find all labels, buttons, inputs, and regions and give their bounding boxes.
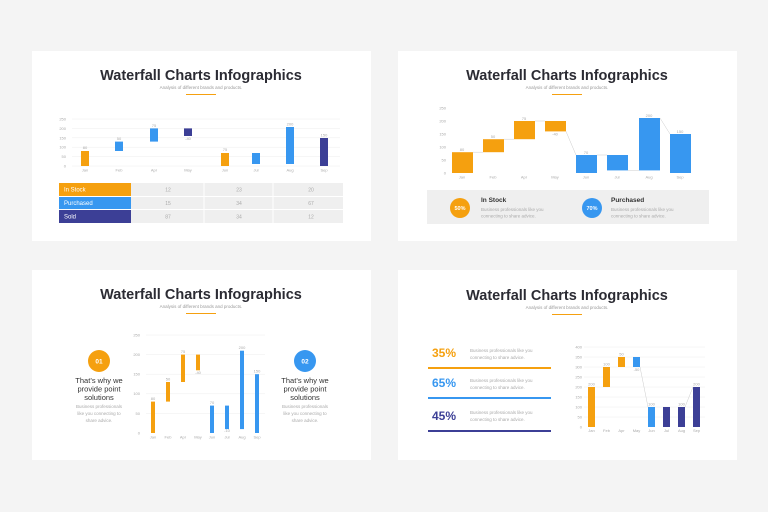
chart 1: 150 (321, 132, 328, 138)
chart 4: Feb (603, 428, 611, 433)
chart 2: 0 (444, 170, 447, 176)
chart 3: Feb (165, 434, 172, 440)
chart 3: 200 (239, 345, 246, 350)
table: 12 (165, 188, 171, 194)
callout 01: That’s why we (75, 376, 123, 385)
title 2: Waterfall Charts Infographics (466, 68, 668, 84)
chart 2: 75 (522, 116, 527, 121)
stats list: 65% (432, 376, 456, 390)
callout 02 (281, 350, 329, 423)
chart 1: Apr (151, 168, 158, 172)
chart 3: 100 (133, 391, 141, 396)
chart 2: Feb (490, 174, 497, 180)
table: 23 (236, 188, 242, 194)
chart 2: May (551, 174, 559, 180)
stats list: Business professionals like you (470, 410, 533, 415)
title 3: Waterfall Charts Infographics (100, 287, 302, 303)
subtitle 2: Analysis of different brands and products. (526, 85, 608, 90)
subtitle 4: Analysis of different brands and products. (526, 305, 608, 310)
stats list: connecting to share advice. (470, 417, 525, 422)
chart 1: 250 (59, 116, 67, 122)
chart 3: 0 (138, 430, 141, 436)
chart 3: Sep (253, 434, 261, 440)
title 1: Waterfall Charts Infographics (100, 68, 302, 84)
chart 1: 80 (83, 145, 88, 150)
chart 4: -50 (634, 367, 640, 372)
chart 2: Sep (676, 174, 684, 180)
chart 4: 50 (619, 352, 624, 356)
chart 2: 80 (460, 147, 465, 152)
table: 12 (308, 214, 314, 220)
chart 1: May (184, 168, 192, 172)
stats list (428, 346, 551, 432)
chart 3: 50 (136, 411, 141, 416)
chart 1: 150 (59, 135, 67, 140)
chart 1: 100 (59, 145, 67, 150)
chart 1: 50 (62, 154, 67, 159)
panel: card 2 (398, 51, 737, 241)
table: 67 (308, 201, 314, 207)
chart 3: Jan (150, 434, 156, 440)
table: 34 (236, 214, 242, 220)
callout 02: That’s why we (281, 376, 329, 385)
chart 1: Jul (253, 168, 259, 172)
callout 01: solutions (84, 393, 114, 402)
info panel: Business professionals like you (481, 207, 544, 212)
chart 1: Sep (320, 168, 328, 172)
panel: card 3 (32, 270, 371, 460)
chart 4: 350 (575, 354, 583, 360)
chart 3: 150 (254, 368, 261, 374)
info panel: connecting to share advice. (611, 214, 666, 218)
title 4: Waterfall Charts Infographics (466, 288, 668, 304)
chart 1: 75 (152, 123, 157, 128)
callout 02: share advice. (292, 418, 318, 423)
info panel: In Stock (481, 197, 507, 204)
chart 3: -10 (224, 428, 231, 433)
chart 3: 250 (133, 332, 141, 338)
callout 02: solutions (290, 393, 320, 402)
table: 34 (236, 201, 242, 207)
table: 15 (165, 201, 171, 207)
chart 2: Jul (614, 174, 620, 180)
chart 1: 200 (287, 122, 294, 126)
chart 2: Apr (521, 174, 528, 180)
callout 02: 02 (301, 358, 309, 366)
chart 4: 100 (575, 404, 583, 410)
info panel: 70% (586, 206, 598, 212)
panel: card 4 (398, 270, 737, 460)
chart 3: Aug (238, 434, 246, 440)
chart 1: 0 (64, 164, 67, 168)
chart 4: 300 (575, 364, 583, 370)
subtitle 3: Analysis of different brands and products. (160, 304, 242, 309)
chart 4 (575, 344, 705, 433)
chart 3: Jun (209, 434, 215, 440)
chart 3: 50 (166, 376, 171, 382)
table: 20 (308, 188, 314, 194)
callout 02: provide point (284, 384, 327, 394)
chart 2: 200 (646, 113, 653, 118)
callout 01: like you connecting to (77, 411, 121, 416)
chart 1: 75 (223, 147, 228, 152)
stats list: connecting to share advice. (470, 385, 525, 390)
table (59, 183, 343, 223)
chart 4: 100 (603, 362, 611, 366)
chart 4: Apr (618, 428, 625, 433)
chart 1: Aug (286, 168, 294, 172)
callout 01 (75, 350, 123, 423)
chart 1: Jun (222, 168, 228, 172)
chart 3: 200 (133, 352, 141, 357)
chart 2: Jun (583, 174, 589, 180)
chart 1: Jan (82, 168, 88, 172)
table: 87 (165, 214, 171, 220)
chart 3: 80 (151, 396, 156, 401)
chart 3: Jul (224, 434, 230, 440)
stats list: 35% (432, 346, 456, 360)
chart 4: 100 (648, 402, 656, 406)
chart 3: -40 (195, 370, 202, 375)
info panel: connecting to share advice. (481, 214, 536, 218)
chart 4: May (633, 428, 640, 433)
chart 2: 150 (439, 132, 447, 136)
chart 2: -40 (552, 132, 559, 136)
chart 2: 100 (439, 144, 447, 150)
table: Purchased (64, 201, 93, 207)
chart 4: Jul (664, 428, 669, 433)
stats list: Business professionals like you (470, 378, 533, 383)
panel: card 1 (32, 51, 371, 241)
table: In Stock (64, 188, 87, 194)
chart 2: Jan (459, 174, 465, 180)
chart 1: -40 (185, 136, 192, 141)
chart 4: 0 (580, 424, 583, 430)
chart 4: 200 (575, 384, 583, 390)
stats list: Business professionals like you (470, 348, 533, 353)
info panel (427, 190, 709, 224)
chart 4: 250 (575, 374, 583, 380)
callout 01: 01 (95, 358, 103, 366)
chart 3: Apr (180, 434, 187, 440)
info panel: 50% (454, 206, 466, 212)
info panel: Purchased (611, 197, 644, 204)
chart 4: 150 (575, 394, 583, 400)
chart 2 (439, 106, 691, 180)
chart 3: 70 (210, 400, 215, 405)
chart 3 (133, 332, 265, 440)
chart 2: 150 (677, 129, 684, 134)
chart 3: 150 (133, 372, 141, 376)
callout 01: provide point (78, 384, 121, 394)
chart 4: Jun (648, 428, 655, 433)
subtitle 1: Analysis of different brands and products. (160, 85, 242, 90)
chart 4: 100 (678, 402, 686, 406)
chart 2: 50 (491, 134, 496, 139)
stats list: 45% (432, 409, 456, 423)
chart 2: 70 (584, 150, 589, 155)
chart 4: 50 (578, 414, 583, 420)
callout 02: Business professionals (282, 404, 329, 409)
chart 4: 400 (575, 344, 583, 350)
chart 1: 50 (117, 136, 122, 141)
stats list: connecting to share advice. (470, 355, 525, 360)
chart 4: 200 (693, 382, 701, 386)
table: Sold (64, 214, 76, 220)
chart 4: Sep (693, 428, 701, 433)
chart 1 (59, 116, 340, 172)
info panel: Business professionals like you (611, 207, 674, 212)
chart 1: 200 (59, 126, 67, 131)
chart 3: May (194, 434, 202, 440)
chart 2: 200 (439, 118, 447, 124)
chart 1: Feb (116, 168, 123, 172)
chart 4: 200 (588, 382, 596, 386)
chart 4: Jan (588, 428, 595, 433)
chart 2: Aug (645, 174, 653, 180)
callout 01: Business professionals (76, 404, 123, 409)
chart 2: 50 (442, 158, 447, 162)
chart 4: Aug (678, 428, 685, 433)
callout 02: like you connecting to (283, 411, 327, 416)
callout 01: share advice. (86, 418, 112, 423)
chart 3: 75 (181, 349, 186, 354)
chart 2: 250 (439, 106, 447, 110)
